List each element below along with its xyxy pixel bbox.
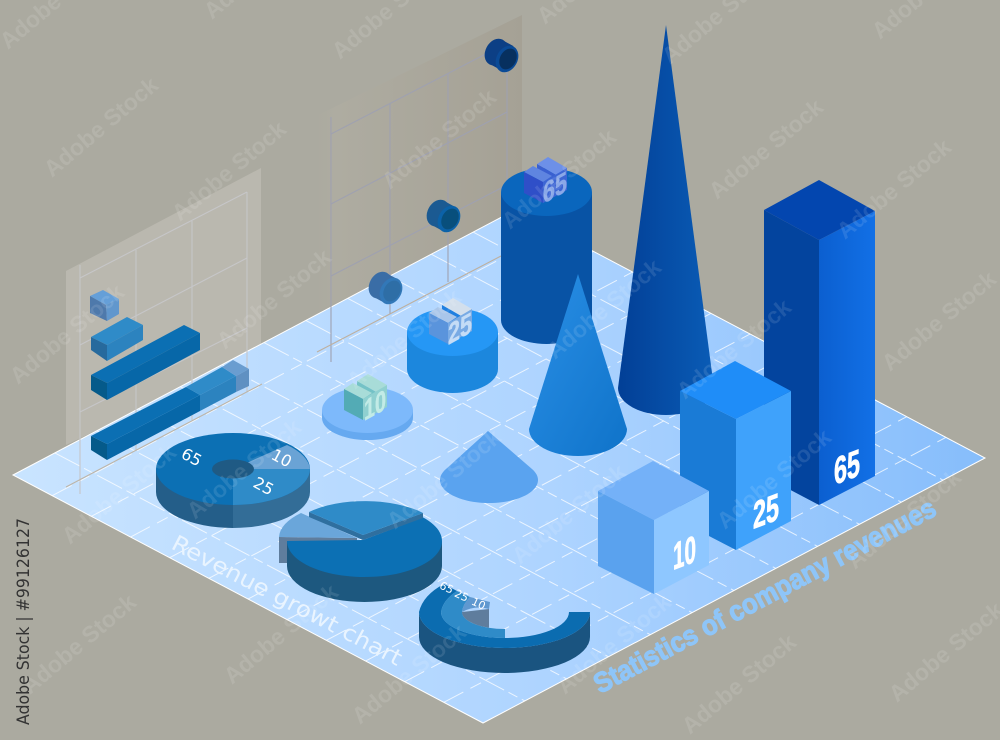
bar chart: small cube 10 [90,290,119,321]
watermark: Adobe Stock: Adobe Stock [167,115,291,226]
chart: half ring: 10 [469,595,488,613]
chart: box 10 [598,461,709,594]
chart: flat cylinder 10 [322,387,413,440]
label: extruded 65: 65 [543,165,567,211]
chart: box 25: 25 [753,485,779,538]
chart: medium cone [529,274,627,456]
chart: donut [156,433,310,528]
panel: back wall left [66,168,261,445]
chart: box 65 [764,180,875,505]
icon: small cylinder top [480,35,523,76]
bar chart: stacked bar [91,360,249,460]
watermark: Adobe Stock: Adobe Stock [677,628,801,739]
watermark: Adobe Stock: Adobe Stock [347,618,471,729]
label: extruded 10 [344,374,387,428]
chart: exploded pie [279,501,442,602]
panel: right wall chart grid [317,43,507,362]
chart: tall cylinder 65 [501,168,592,344]
heading: revenue chart label: Revenue growt chart [167,531,406,672]
watermark: Adobe Stock: Adobe Stock [832,133,956,244]
panel: floor grid [13,210,985,723]
watermark: Adobe Stock: Adobe Stock [57,438,181,549]
watermark: Adobe Stock: Adobe Stock [212,243,336,354]
watermark: Adobe Stock: Adobe Stock [39,71,163,182]
chart: half ring: 65 [437,579,456,597]
watermark: Adobe Stock: Adobe Stock [377,83,501,194]
chart: half ring [419,579,590,673]
icon: small cylinder lower [364,268,407,308]
watermark: Adobe Stock: Adobe Stock [877,265,1000,376]
heading: statistics label: Statistics of company revenues [588,492,941,699]
chart: box 25 [680,361,791,550]
label: extruded 25 [429,298,472,352]
watermark: Adobe Stock: Adobe Stock [382,423,506,534]
watermark: Adobe Stock: Adobe Stock [342,283,466,394]
icon: small cylinder middle [422,196,465,236]
chart: tall cone [618,25,714,415]
watermark: Adobe Stock: Adobe Stock [542,253,666,364]
chart: small cone [440,431,538,503]
watermark: Adobe Stock: Adobe Stock [5,278,129,389]
watermark: Adobe Stock: Adobe Stock [497,123,621,234]
watermark: Adobe Stock: Adobe Stock [712,423,836,534]
chart: box 65: 65 [834,441,860,494]
text: stock id: Adobe Stock | #99126127 [14,518,34,725]
label: extruded 10: 10 [364,383,386,428]
watermark: Adobe Stock: Adobe Stock [842,463,966,574]
bar chart: bar 25 [91,317,143,361]
label: extruded 65 [524,157,567,211]
watermark: Adobe Stock: Adobe Stock [507,458,631,569]
watermark: Adobe Stock: Adobe Stock [552,588,676,699]
watermark: Adobe Stock: Adobe Stock [182,413,306,524]
chart: donut: 10 [268,445,295,471]
panel: back wall right [316,15,522,312]
label: extruded 25: 25 [448,306,472,352]
chart: medium cylinder 25 [407,308,498,393]
bar chart: bar 65 [91,325,200,400]
watermark: Adobe Stock: Adobe Stock [219,578,343,689]
chart: box 10: 10 [673,527,696,579]
watermark: Adobe Stock: Adobe Stock [672,293,796,404]
chart: donut: 25 [250,473,277,499]
chart: donut: 65 [178,444,205,470]
panel: left wall chart grid [66,192,262,494]
chart: half ring: 25 [452,587,471,605]
watermark: Adobe Stock: Adobe Stock [17,588,141,699]
watermark: Adobe Stock: Adobe Stock [704,93,828,204]
